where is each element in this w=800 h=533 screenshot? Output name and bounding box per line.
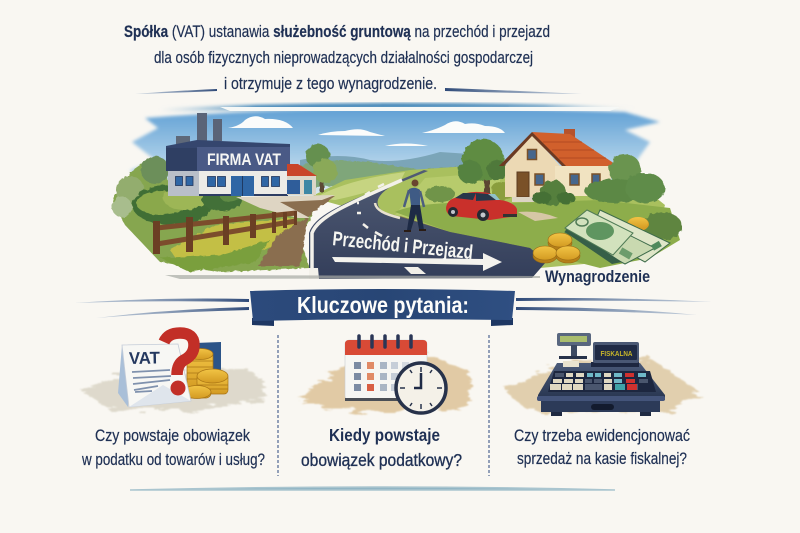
brush smudge <box>300 355 470 412</box>
tree beside house <box>425 139 513 202</box>
coins <box>533 233 580 263</box>
question text: Czy powstaje obowiązek <box>95 427 251 445</box>
heading: intro text: Spółka (VAT) ustanawia służebność gruntową na przechód i przejazd <box>124 22 550 41</box>
swooshes beside banner <box>75 298 712 318</box>
question text: Czy trzeba ewidencjonować <box>514 427 690 445</box>
sky <box>130 108 660 200</box>
coin behind money <box>627 217 649 231</box>
keypad <box>548 371 656 392</box>
house <box>499 129 618 202</box>
bushes by house <box>532 154 682 240</box>
fence <box>153 211 297 254</box>
right ground <box>395 200 680 268</box>
question text: obowiązek podatkowy? <box>301 450 462 470</box>
icon: cash register <box>537 333 665 416</box>
tree behind factory <box>306 144 337 192</box>
factory: Firma VAT <box>166 113 317 196</box>
factory sign: FIRMA VAT <box>207 151 281 169</box>
question text: w podatku od towarów i usług? <box>81 451 265 469</box>
heading: intro text: dla osób fizycznych nieprowadzących działalności gospodarczej <box>154 48 533 67</box>
icon: calendar and clock <box>345 336 446 413</box>
brush smudge <box>506 358 700 412</box>
banner title: Kluczowe pytania: <box>297 292 469 318</box>
road <box>309 170 546 279</box>
question text <box>301 425 462 470</box>
banner: Kluczowe pytania <box>250 289 515 326</box>
clouds <box>228 116 505 146</box>
distant hills <box>300 152 470 182</box>
icon: VAT document with coins and question mark: VAT <box>129 348 161 368</box>
question text <box>514 427 690 468</box>
car <box>446 192 517 221</box>
left ground and bushes <box>112 156 320 272</box>
question text: Kiedy powstaje <box>329 425 440 445</box>
label: Wynagrodzenie: Wynagrodzenie <box>545 267 650 286</box>
money <box>565 210 670 264</box>
panel: question 2 calendar <box>300 336 470 470</box>
display label: FISKALNA <box>600 349 633 358</box>
question text: sprzedaż na kasie fiskalnej? <box>517 450 687 468</box>
panel: question 3 cash register <box>506 333 700 468</box>
brush smudge <box>82 368 265 410</box>
person walking <box>404 180 426 231</box>
far fields <box>310 166 665 268</box>
illustration: landscape scene <box>112 103 682 286</box>
road label: Przechód i Przejazd <box>332 228 474 264</box>
heading: intro text <box>124 22 550 93</box>
panel: question 1 VAT <box>81 333 265 469</box>
question text <box>81 427 265 469</box>
icon: VAT document with coins and question mark <box>118 333 228 407</box>
dirt path <box>258 196 335 266</box>
heading: intro text: i otrzymuje z tego wynagrodzenie. <box>224 74 437 93</box>
column dividers <box>278 335 489 476</box>
